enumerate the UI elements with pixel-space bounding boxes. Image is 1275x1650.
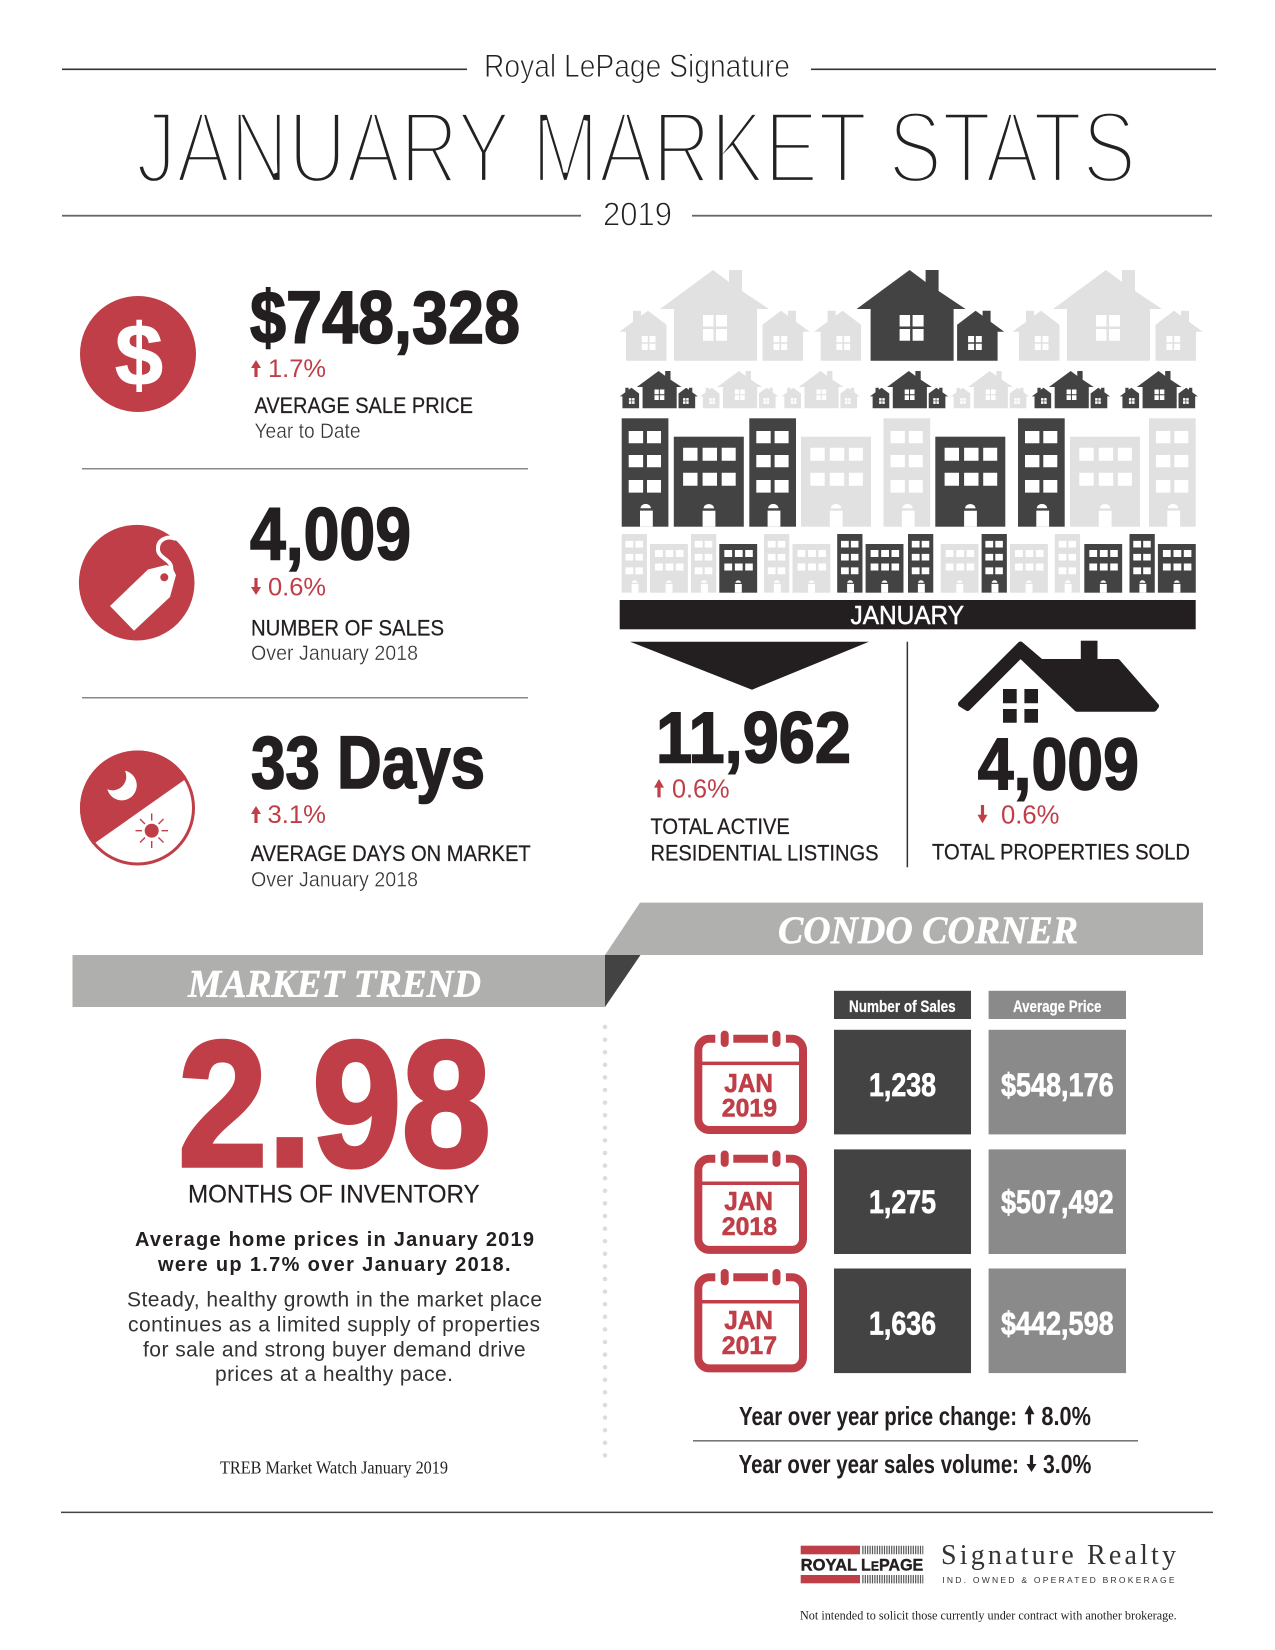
- icon: calendar 2018: JAN: [724, 1186, 773, 1216]
- panel: key stats: [70, 276, 531, 892]
- sales volume summary: 3.0%: [1043, 1449, 1091, 1479]
- stat: average sale price: [80, 276, 520, 443]
- brokerage tagline: IND. OWNED & OPERATED BROKERAGE: [942, 1575, 1175, 1585]
- price 2019: [989, 1030, 1126, 1134]
- row: large houses: [619, 270, 1203, 361]
- icon: calendar 2019: JAN: [724, 1068, 773, 1098]
- price 2017: [989, 1268, 1126, 1373]
- banner: market trend: [72, 955, 605, 1007]
- icon: calendar 2017: JAN: [724, 1305, 773, 1335]
- column header: average price: [989, 991, 1126, 1019]
- months of inventory label: MONTHS OF INVENTORY: [188, 1180, 480, 1208]
- panel: condo corner: [605, 903, 1203, 1479]
- logo: royal lepage: LEPAGE: [861, 1557, 923, 1575]
- sales volume summary: Year over year sales volume:: [739, 1449, 1019, 1479]
- row: small condo buildings: [622, 534, 1196, 593]
- icon: calendar 2017: [698, 1269, 803, 1368]
- sales 2019: [834, 1030, 971, 1134]
- icon: dollar: $: [115, 307, 163, 404]
- sales 2019: 1,238: [869, 1067, 936, 1103]
- icon: house roof: [961, 641, 1156, 723]
- sales 2018: [834, 1149, 971, 1254]
- value: 11,962: [656, 698, 851, 778]
- change: 0.6%: [1001, 799, 1059, 829]
- change: 0.6%: [672, 773, 730, 803]
- january banner: JANUARY: [850, 600, 964, 630]
- banner: condo corner: CONDO CORNER: [778, 909, 1078, 952]
- label: AVERAGE SALE PRICE: [254, 393, 473, 418]
- icon: calendar 2017: 2017: [722, 1332, 777, 1360]
- label: NUMBER OF SALES: [251, 616, 444, 640]
- change: 1.7%: [268, 355, 326, 383]
- column header: number of sales: Number of Sales: [849, 997, 956, 1016]
- label: TOTAL ACTIVE: [650, 814, 790, 839]
- icon: dollar: [80, 296, 196, 412]
- properties sold: [932, 641, 1190, 864]
- price 2019: $548,176: [1001, 1067, 1114, 1103]
- brokerage name: Signature Realty: [941, 1540, 1176, 1571]
- icon: calendar 2018: [698, 1150, 803, 1250]
- label: TOTAL PROPERTIES SOLD: [932, 839, 1190, 864]
- body text: [127, 1288, 542, 1386]
- active listings: [650, 698, 878, 866]
- sublabel: Year to Date: [254, 419, 360, 443]
- january banner: [620, 600, 1196, 630]
- illustration: houses and condos: [619, 270, 1203, 593]
- body text: Steady, healthy growth in the market place: [127, 1288, 542, 1312]
- sales 2017: 1,636: [869, 1305, 936, 1341]
- icon: day and night: [80, 750, 195, 866]
- row: january 2018: [698, 1149, 1126, 1254]
- disclaimer: Not intended to solicit those currently under contract with another brokerage.: [800, 1607, 1177, 1622]
- row: january 2017: [698, 1268, 1126, 1373]
- months of inventory value: 2.98: [178, 1004, 491, 1204]
- sublabel: Over January 2018: [251, 868, 418, 892]
- row: large condo buildings: [622, 418, 1196, 527]
- banner: condo corner: [605, 903, 1203, 1007]
- icon: calendar 2019: 2019: [722, 1094, 777, 1122]
- panel: market trend: [72, 955, 605, 1478]
- row: january 2019: [698, 1030, 1126, 1134]
- value: $748,328: [250, 276, 520, 359]
- logo: royal lepage: [801, 1546, 923, 1583]
- label line 2: RESIDENTIAL LISTINGS: [650, 841, 878, 866]
- year line: 2019: [603, 196, 672, 232]
- column header: number of sales: [834, 991, 971, 1019]
- price 2018: [989, 1149, 1126, 1254]
- change: 0.6%: [268, 574, 326, 602]
- body text: for sale and strong buyer demand drive: [143, 1338, 526, 1362]
- value: 4,009: [978, 724, 1139, 806]
- arrow: pointing down: [630, 642, 869, 690]
- summary: [135, 1229, 534, 1276]
- summary: were up 1.7% over January 2018.: [157, 1254, 510, 1276]
- logo: royal lepage: ROYAL: [801, 1557, 857, 1575]
- brand line: Royal LePage Signature: [484, 48, 790, 84]
- body text: continues as a limited supply of properties: [128, 1314, 540, 1336]
- summary: Average home prices in January 2019: [135, 1229, 534, 1251]
- sublabel: Over January 2018: [251, 641, 418, 665]
- icon: calendar 2019: [698, 1031, 803, 1130]
- icon: calendar 2018: 2018: [722, 1213, 777, 1241]
- price 2017: $442,598: [1001, 1305, 1114, 1341]
- body text: prices at a healthy pace.: [215, 1363, 453, 1386]
- price change summary: Year over year price change:: [739, 1401, 1017, 1431]
- price 2018: $507,492: [1001, 1184, 1114, 1220]
- icon: price tag: [79, 525, 194, 640]
- value: 33 Days: [251, 721, 485, 804]
- footer: [800, 1540, 1177, 1622]
- column header: average price: Average Price: [1013, 997, 1101, 1016]
- label: AVERAGE DAYS ON MARKET: [251, 841, 531, 866]
- change: 3.1%: [268, 801, 326, 829]
- row: small houses: [620, 371, 1198, 408]
- sales 2017: [834, 1268, 971, 1373]
- stat: number of sales: [79, 492, 444, 665]
- panel: january totals: [620, 600, 1196, 867]
- sales 2018: 1,275: [869, 1184, 936, 1220]
- stat: days on market: [80, 736, 530, 891]
- value: 4,009: [250, 492, 411, 576]
- banner: market trend: MARKET TREND: [187, 962, 481, 1006]
- header: [62, 48, 1216, 232]
- price change summary: 8.0%: [1041, 1401, 1091, 1431]
- source: TREB Market Watch January 2019: [220, 1458, 448, 1478]
